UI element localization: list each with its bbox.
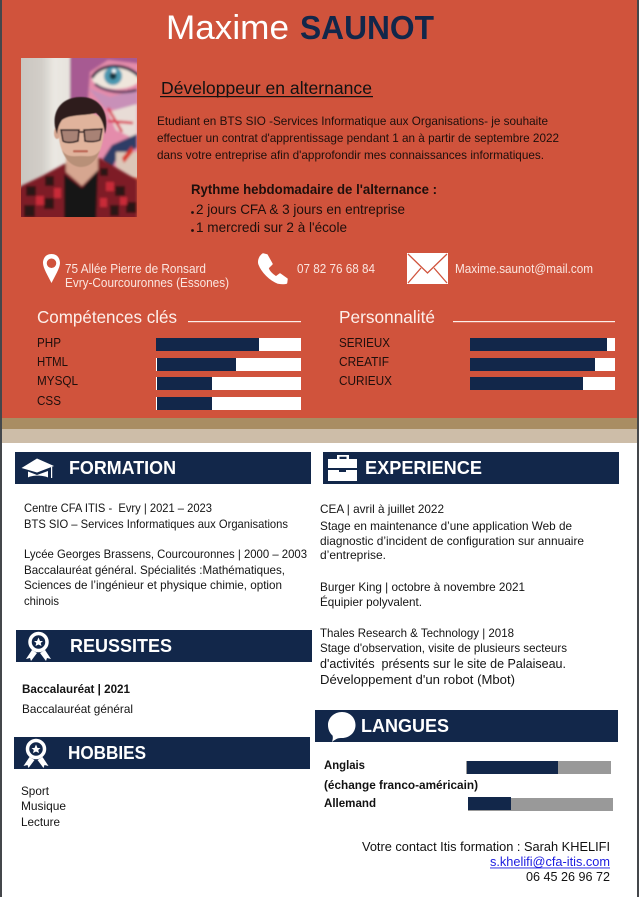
- address: Evry-Courcouronnes (Essones): [65, 276, 229, 290]
- skill: PHP: PHP: [37, 336, 61, 350]
- trait: curieux: CURIEUX: [339, 374, 393, 388]
- text: formation: Centre CFA ITIS - Evry | 2021 – 2023: [24, 501, 212, 515]
- neck: [66, 155, 98, 186]
- text: hobbies: Sport: [21, 784, 50, 798]
- panel: personality: [339, 307, 615, 390]
- panel: personality: Personnalité: [339, 307, 435, 327]
- text: experience: Thales Research & Technology | 2018: [320, 626, 514, 640]
- text: experience: d’entreprise.: [320, 548, 386, 562]
- icon: envelope: [407, 253, 448, 284]
- heading: reussites: [16, 630, 312, 662]
- address: [65, 262, 229, 290]
- shirt: [21, 156, 137, 217]
- glasses: [61, 129, 102, 142]
- text: hobbies: Lecture: [21, 815, 60, 829]
- heading: langues: [315, 710, 618, 742]
- text: hobbies: Musique: [21, 799, 66, 813]
- heading: hobbies: [14, 737, 310, 769]
- skill: HTML: [37, 355, 301, 371]
- heading: reussites: REUSSITES: [70, 636, 172, 656]
- text: experience: d'activités présents sur le site de Palaiseau.: [320, 657, 566, 671]
- contact block: 06 45 26 96 72: [526, 870, 610, 884]
- contact block: [362, 840, 610, 884]
- trait: curieux: [339, 374, 615, 390]
- language: allemand: [324, 796, 613, 811]
- alternance rhythm: Rythme hebdomadaire de l'alternance :: [191, 181, 437, 197]
- text: experience: Burger King | octobre à novembre 2021: [320, 580, 525, 594]
- language: allemand: Allemand: [324, 796, 376, 810]
- panel: key skills: Compétences clés: [37, 307, 177, 327]
- hair: [55, 97, 106, 134]
- text: formation: Sciences de l’ingénieur et physique chimie, option: [24, 578, 282, 592]
- text: reussites: Baccalauréat | 2021: [22, 682, 130, 696]
- contact block: Votre contact Itis formation : Sarah KHELIFI: [362, 840, 610, 854]
- trait: creatif: CREATIF: [339, 355, 389, 369]
- alternance rhythm: 2 jours CFA & 3 jours en entreprise: [196, 201, 405, 217]
- heading: formation: FORMATION: [69, 458, 176, 478]
- skill: HTML: HTML: [37, 355, 68, 369]
- t-shirt: [64, 170, 98, 225]
- text: experience: Équipier polyvalent.: [320, 594, 422, 609]
- email: Maxime.saunot@mail.com: [455, 262, 593, 276]
- text: hobbies: [21, 784, 66, 829]
- trait: creatif: [339, 355, 615, 371]
- alternance rhythm: [191, 181, 437, 235]
- title: Maxime: [166, 9, 289, 47]
- text: experience: Stage d'observation, visite de plusieurs secteurs: [320, 641, 567, 655]
- heading: hobbies: HOBBIES: [68, 743, 146, 763]
- intro text: effectuer un contrat d'apprentissage pendant 1 an à partir de septembre 2022: [157, 131, 559, 145]
- job title: Développeur en alternance: [161, 78, 372, 98]
- intro text: [157, 114, 559, 162]
- skill: PHP: [37, 336, 301, 351]
- text: formation: [24, 501, 307, 608]
- skill: MYSQL: MYSQL: [37, 374, 78, 388]
- contact block: s.khelifi@cfa-itis.com: [490, 855, 610, 869]
- skill: CSS: [37, 394, 301, 410]
- text: experience: CEA | avril à juillet 2022: [320, 502, 444, 516]
- heading: formation: [15, 452, 311, 484]
- text: formation: BTS SIO – Services Informatiques aux Organisations: [24, 517, 288, 531]
- text: formation: Lycée Georges Brassens, Courcouronnes | 2000 – 2003: [24, 547, 307, 561]
- skill: CSS: CSS: [37, 394, 61, 408]
- text: experience: Développement d'un robot (Mbot): [320, 673, 515, 687]
- language: anglais: Anglais: [324, 758, 365, 772]
- icon: phone: [259, 254, 287, 284]
- text: formation: chinois: [24, 594, 59, 608]
- title: SAUNOT: [300, 10, 434, 47]
- text: experience: [320, 502, 584, 687]
- heading: experience: EXPERIENCE: [365, 458, 482, 478]
- language: anglais: (échange franco-américain): [324, 778, 478, 792]
- heading: langues: LANGUES: [361, 716, 449, 736]
- heading: experience: [323, 452, 619, 484]
- skill: MYSQL: [37, 374, 301, 390]
- text: formation: Baccalauréat général. Spécialités :Mathématiques,: [24, 563, 285, 577]
- trait: serieux: [339, 336, 615, 351]
- text: reussites: [22, 682, 133, 716]
- panel: key skills: [37, 307, 301, 410]
- address: 75 Allée Pierre de Ronsard: [65, 262, 206, 276]
- icon: location pin: [43, 254, 60, 283]
- alternance rhythm: 1 mercredi sur 2 à l'école: [196, 219, 347, 235]
- title: [166, 9, 434, 47]
- photo: [21, 58, 137, 217]
- text: experience: Stage en maintenance d’une application Web de: [320, 519, 572, 533]
- intro text: dans votre entreprise afin d'approfondir mes connaissances informatiques.: [157, 148, 544, 162]
- language: anglais: [324, 758, 611, 792]
- text: reussites: Baccalauréat général: [22, 702, 133, 716]
- panel: red header: [0, 0, 639, 443]
- face: [58, 113, 105, 156]
- intro text: Etudiant en BTS SIO -Services Informatique aux Organisations- je souhaite: [157, 114, 548, 128]
- text: experience: diagnostic d’incident de configuration sur annuaire: [320, 534, 584, 548]
- trait: serieux: SERIEUX: [339, 336, 391, 350]
- phone number: 07 82 76 68 84: [297, 262, 375, 276]
